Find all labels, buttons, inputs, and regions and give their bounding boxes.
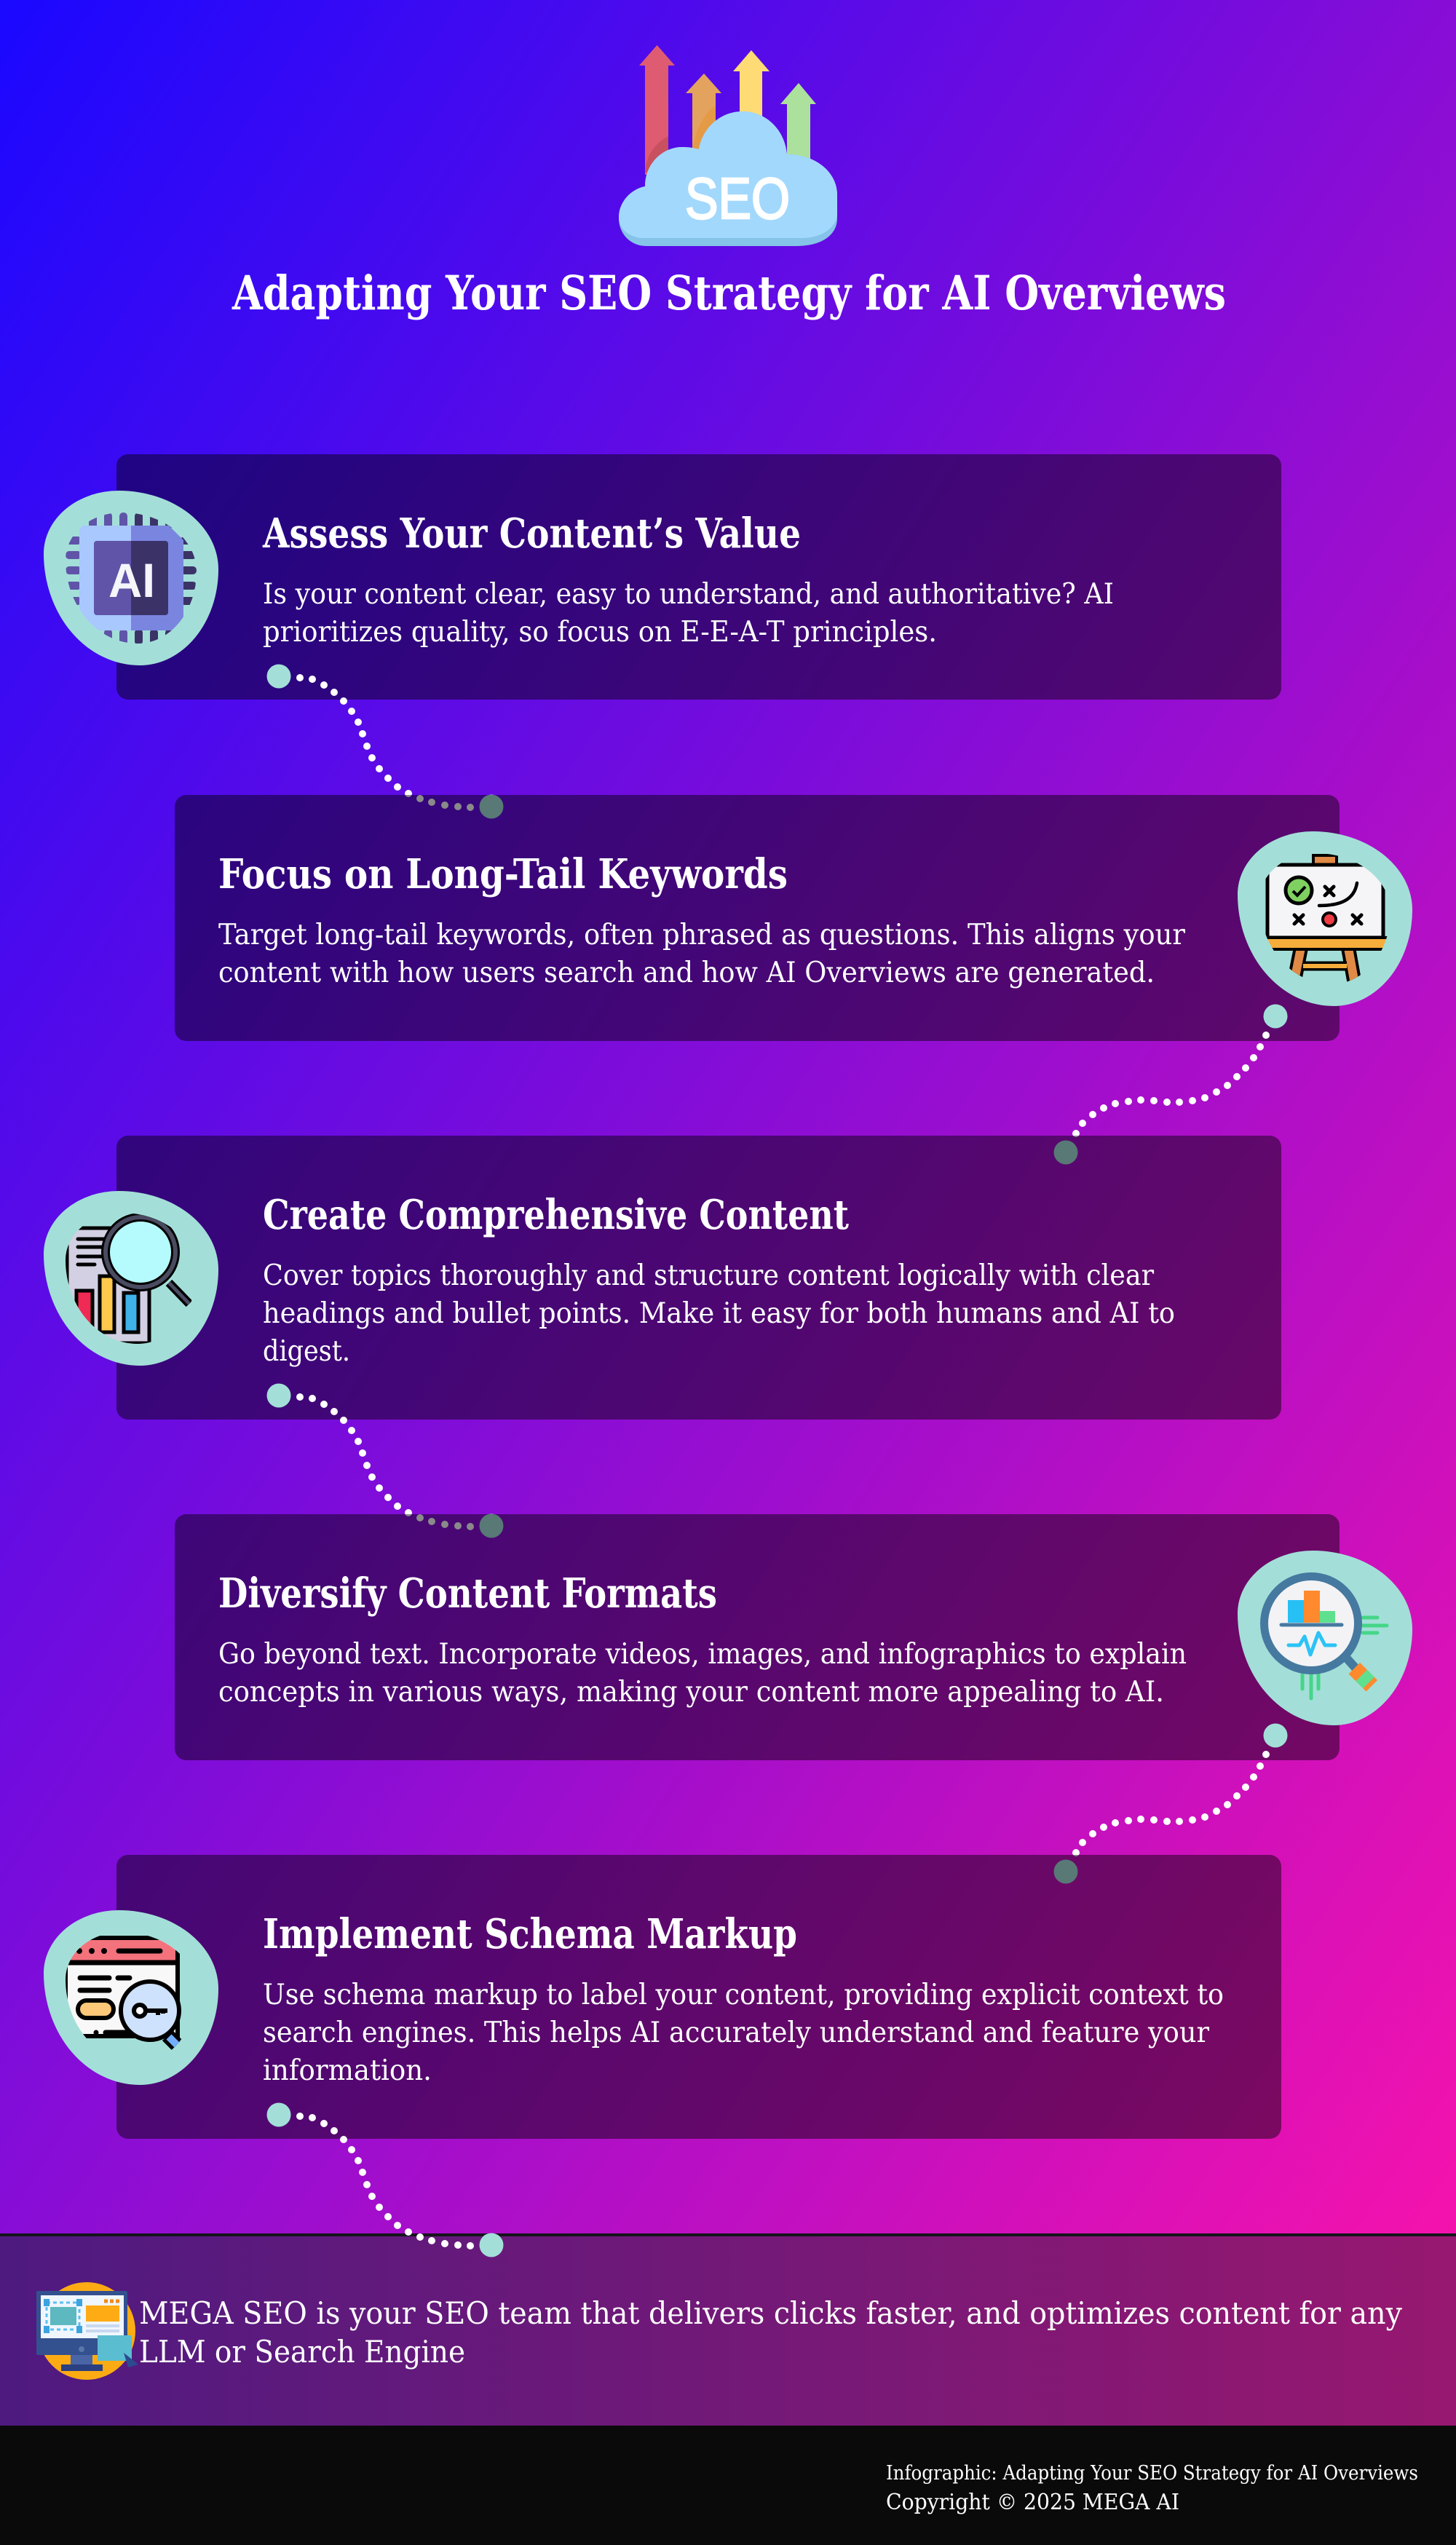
connector: step 2 to step 3 [1054, 1005, 1287, 1165]
copyright: Copyright © 2025 MEGA AI [886, 2490, 1179, 2515]
text block: Cover topics thoroughly and structure content logically with clear [263, 1259, 1154, 1292]
text block: headings and bullet points. Make it easy for both humans and AI to [263, 1297, 1175, 1330]
panel: step 1 assess content value [44, 454, 1281, 700]
footer [0, 2426, 1456, 2545]
call to action text: LLM or Search Engine [139, 2334, 465, 2370]
heading: Implement Schema Markup [263, 1910, 797, 1958]
text block: concepts in various ways, making your content more appealing to AI. [218, 1676, 1164, 1709]
connector: step 1 to step 2 [266, 664, 504, 818]
text block: Use schema markup to label your content, providing explicit context to [263, 1979, 1224, 2011]
text block: Target long-tail keywords, often phrased as questions. This aligns your [218, 919, 1185, 951]
text block [263, 1979, 1224, 2087]
panel: step 3 comprehensive content [44, 1136, 1281, 1420]
text block [218, 919, 1185, 989]
text block: digest. [263, 1335, 350, 1368]
divider band: call to action [0, 2233, 1456, 2426]
call to action text [139, 2295, 1402, 2370]
icon: strategy easel [1238, 831, 1412, 1006]
connector: step 4 to step 5 [1054, 1724, 1287, 1884]
text block: information. [263, 2054, 432, 2087]
heading: Focus on Long-Tail Keywords [218, 850, 788, 898]
heading: Assess Your Content’s Value [262, 510, 801, 558]
heading: Create Comprehensive Content [263, 1191, 849, 1239]
heading: Diversify Content Formats [218, 1570, 717, 1618]
text block: prioritizes quality, so focus on E-E-A-T principles. [263, 616, 937, 649]
icon: computer monitor [36, 2282, 138, 2380]
title: Adapting Your SEO Strategy for AI Overviews [232, 266, 1226, 321]
text block [218, 1638, 1187, 1709]
icon: SEO cloud with rising arrows [619, 45, 837, 246]
panel: step 2 long-tail keywords [175, 795, 1412, 1041]
icon: SEO cloud with rising arrows: SEO [685, 166, 790, 231]
connector: step 3 to step 4 [266, 1383, 504, 1537]
text block: Is your content clear, easy to understand, and authoritative? AI [263, 578, 1114, 611]
icon: browser window with key magnifier [44, 1910, 218, 2085]
panel: step 5 schema markup [44, 1855, 1281, 2139]
text block: content with how users search and how AI Overviews are generated. [218, 957, 1155, 989]
call to action text: MEGA SEO is your SEO team that delivers clicks faster, and optimizes content for any [139, 2295, 1402, 2331]
icon: document with magnifier and bars [44, 1191, 218, 1366]
panel: step 4 diversify formats [175, 1514, 1412, 1760]
icon: magnifier with chart [1238, 1551, 1412, 1725]
footer credit: Infographic: Adapting Your SEO Strategy for AI Overviews [886, 2462, 1418, 2485]
text block [263, 1259, 1175, 1368]
text block: search engines. This helps AI accurately understand and feature your [263, 2016, 1209, 2049]
icon: AI chip [44, 491, 218, 665]
icon: AI chip: AI [108, 553, 155, 607]
connector: step 5 to band [266, 2102, 504, 2257]
text block [263, 578, 1114, 649]
text block: Go beyond text. Incorporate videos, images, and infographics to explain [218, 1638, 1187, 1671]
